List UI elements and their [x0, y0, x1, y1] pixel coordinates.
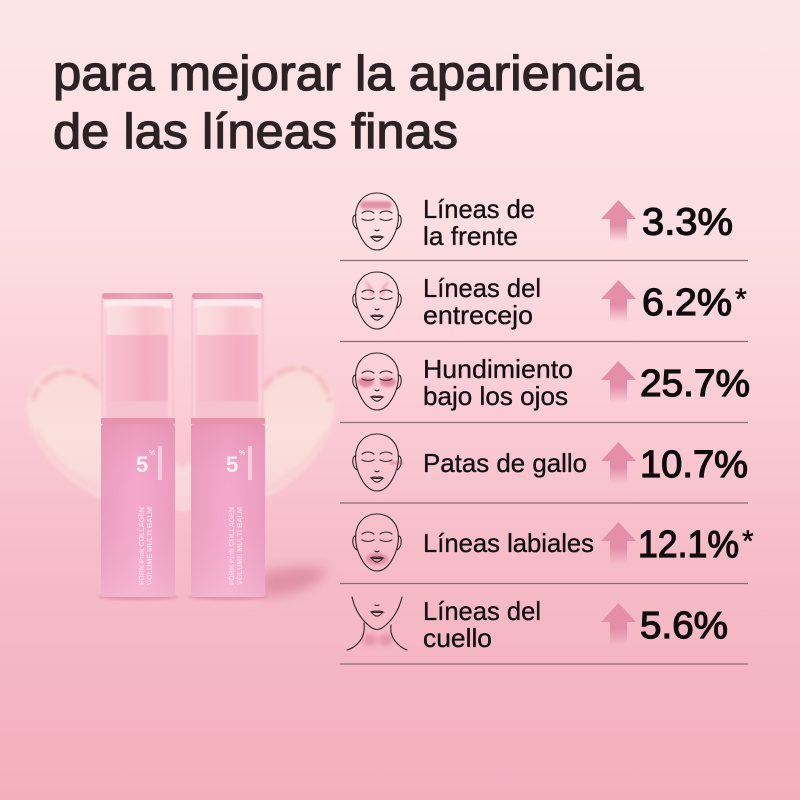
product: right balm stick: 5: [226, 452, 238, 477]
product: left balm stick: VOLUME MULTI BALM: [145, 507, 154, 585]
value: 25.7%: 25.7%: [640, 363, 750, 405]
icon: face with glabella highlight: [353, 272, 401, 329]
arrow up: [601, 522, 636, 564]
label: under-eye hollows: bajo los ojos: [423, 381, 568, 411]
title: de las líneas finas: [53, 105, 458, 159]
label: forehead lines: la frente: [423, 221, 518, 251]
arrow up: [601, 361, 636, 403]
label: lip lines: Líneas labiales: [423, 528, 594, 558]
arrow up: [601, 280, 636, 322]
label: under-eye hollows: Hundimiento: [423, 354, 573, 384]
heart-shaped cream swatch: [27, 363, 335, 510]
label: neck lines: Líneas del: [423, 596, 541, 626]
arrow up: [601, 603, 636, 645]
icon: face with crow's feet highlight: [353, 434, 403, 491]
label: forehead lines: [423, 194, 535, 251]
label: forehead lines: Líneas de: [423, 194, 535, 224]
row: lip lines: [353, 514, 754, 571]
label: under-eye hollows: [423, 354, 573, 411]
product: left balm stick: %: [149, 450, 155, 457]
value: 6.2%*: *: [735, 283, 747, 316]
arrow up: [601, 442, 636, 484]
icon: face with forehead highlight: [353, 193, 401, 250]
label: neck lines: cuello: [423, 623, 492, 653]
value: 12.1%*: 12.1%: [638, 524, 739, 566]
row: forehead lines: [353, 193, 733, 251]
icon: neck with highlight: [347, 597, 407, 650]
product: right balm stick: PDRN Pink COLLAGEN: [227, 507, 236, 585]
product: left balm stick: 5: [136, 452, 148, 477]
product: right balm stick: %: [239, 450, 245, 457]
value: 12.1%*: *: [742, 525, 754, 558]
label: frown lines: [423, 273, 541, 330]
icon: face with lip highlight: [353, 514, 401, 571]
title: para mejorar la apariencia: [53, 47, 644, 101]
label: frown lines: entrecejo: [423, 300, 533, 330]
product: left balm stick: [101, 293, 175, 597]
icon: face with under-eye highlight: [353, 353, 401, 410]
row: neck lines: [347, 596, 728, 653]
row: crow's feet: [353, 434, 748, 491]
product: right balm stick: VOLUME MULTI BALM: [235, 507, 244, 585]
label: neck lines: [423, 596, 541, 653]
product: right balm stick: [191, 293, 265, 597]
label: crow's feet: Patas de gallo: [423, 448, 587, 478]
value: 3.3%: 3.3%: [642, 202, 733, 244]
arrow up: [601, 200, 636, 242]
row: frown lines: [353, 272, 747, 330]
row: under-eye hollows: [353, 353, 750, 411]
product: left balm stick: PDRN Pink COLLAGEN: [137, 507, 146, 585]
title: [53, 47, 644, 159]
value: 10.7%: 10.7%: [640, 444, 748, 486]
product shadow: [98, 567, 328, 600]
label: frown lines: Líneas del: [423, 273, 541, 303]
value: 5.6%: 5.6%: [640, 605, 728, 647]
value: 6.2%*: 6.2%: [642, 282, 732, 324]
